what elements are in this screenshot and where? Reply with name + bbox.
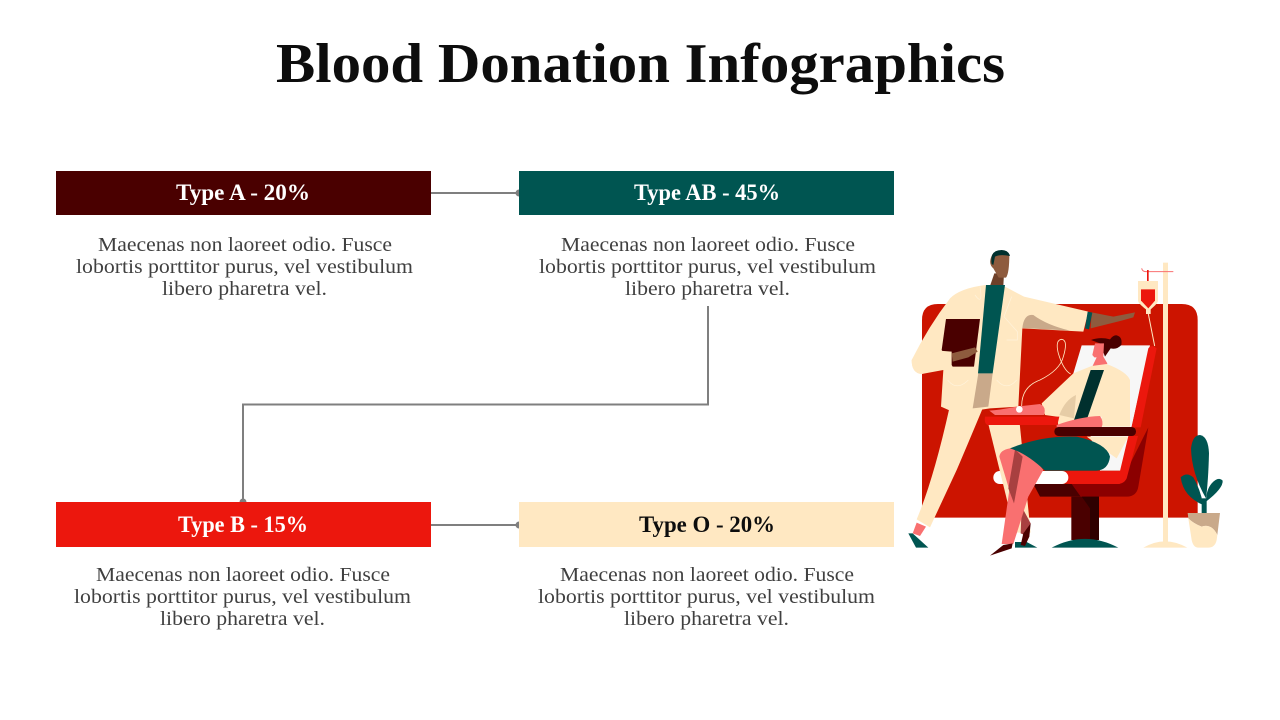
- Type A text: libero pharetra vel.: [162, 278, 327, 300]
- patient: [985, 335, 1136, 556]
- Type O text: libero pharetra vel.: [624, 608, 789, 630]
- Type O header: Type O - 20%: [639, 512, 775, 537]
- panel: Type B: [56, 502, 431, 630]
- Type A text: lobortis porttitor purus, vel vestibulum: [76, 256, 413, 278]
- Type AB text: libero pharetra vel.: [625, 278, 790, 300]
- panel: Type O: [519, 502, 894, 630]
- Type A text: Maecenas non laoreet odio. Fusce: [98, 234, 392, 256]
- panel: Type AB: [519, 171, 894, 300]
- Type AB header: [519, 171, 894, 215]
- Type B header: Type B - 15%: [178, 512, 308, 537]
- Type AB text: [539, 234, 876, 300]
- Type AB header: Type AB - 45%: [634, 180, 780, 205]
- chair: [993, 345, 1157, 548]
- panel: Type A: [56, 171, 431, 300]
- Type B text: Maecenas non laoreet odio. Fusce: [96, 564, 390, 586]
- icon: IV pole: [1143, 263, 1187, 548]
- title: Blood Donation Infographics: [276, 33, 1005, 95]
- arrow: Type AB to Type B: [240, 306, 708, 506]
- Type O text: Maecenas non laoreet odio. Fusce: [560, 564, 854, 586]
- Type A header: Type A - 20%: [176, 180, 310, 205]
- Type B text: libero pharetra vel.: [160, 608, 325, 630]
- Type O text: [538, 564, 875, 630]
- Type A text: [76, 234, 413, 300]
- Type AB text: Maecenas non laoreet odio. Fusce: [561, 234, 855, 256]
- Type AB text: lobortis porttitor purus, vel vestibulum: [539, 256, 876, 278]
- Type A header: [56, 171, 431, 215]
- red background panel: [922, 304, 1198, 518]
- illustration: blood donation scene: [908, 250, 1223, 556]
- Type O header: [519, 502, 894, 547]
- doctor: [908, 250, 1135, 548]
- arrow: Type B to Type O: [431, 522, 522, 528]
- Type B text: lobortis porttitor purus, vel vestibulum: [74, 586, 411, 608]
- Type B header: [56, 502, 431, 547]
- arrow: Type A to Type AB: [431, 190, 522, 196]
- icon: blood bag: [1138, 268, 1173, 346]
- Type O text: lobortis porttitor purus, vel vestibulum: [538, 586, 875, 608]
- Type B text: [74, 564, 411, 630]
- potted plant: [1181, 435, 1223, 548]
